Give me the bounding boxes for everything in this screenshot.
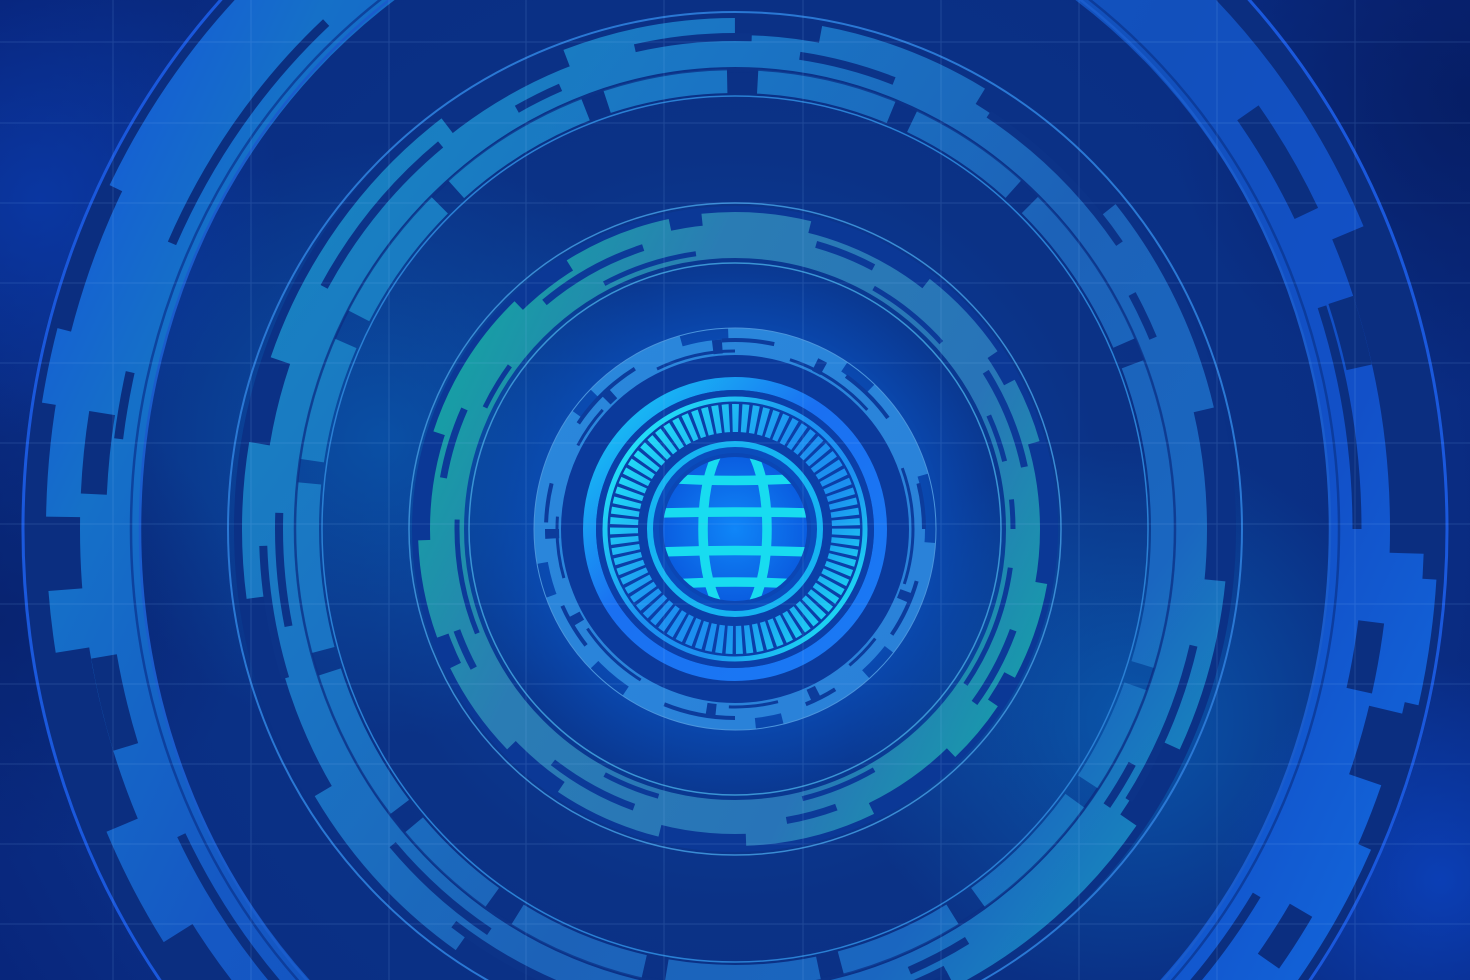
bright inner ring [590,384,880,674]
cyan thin ring [605,399,865,659]
globe frame ring [650,444,820,614]
third ring band [409,203,1061,855]
fourth ring band [534,328,936,730]
second ring band [228,12,1242,980]
tick ring [624,418,846,640]
dark ring behind ticks [623,417,847,641]
icon: globe [660,454,810,601]
